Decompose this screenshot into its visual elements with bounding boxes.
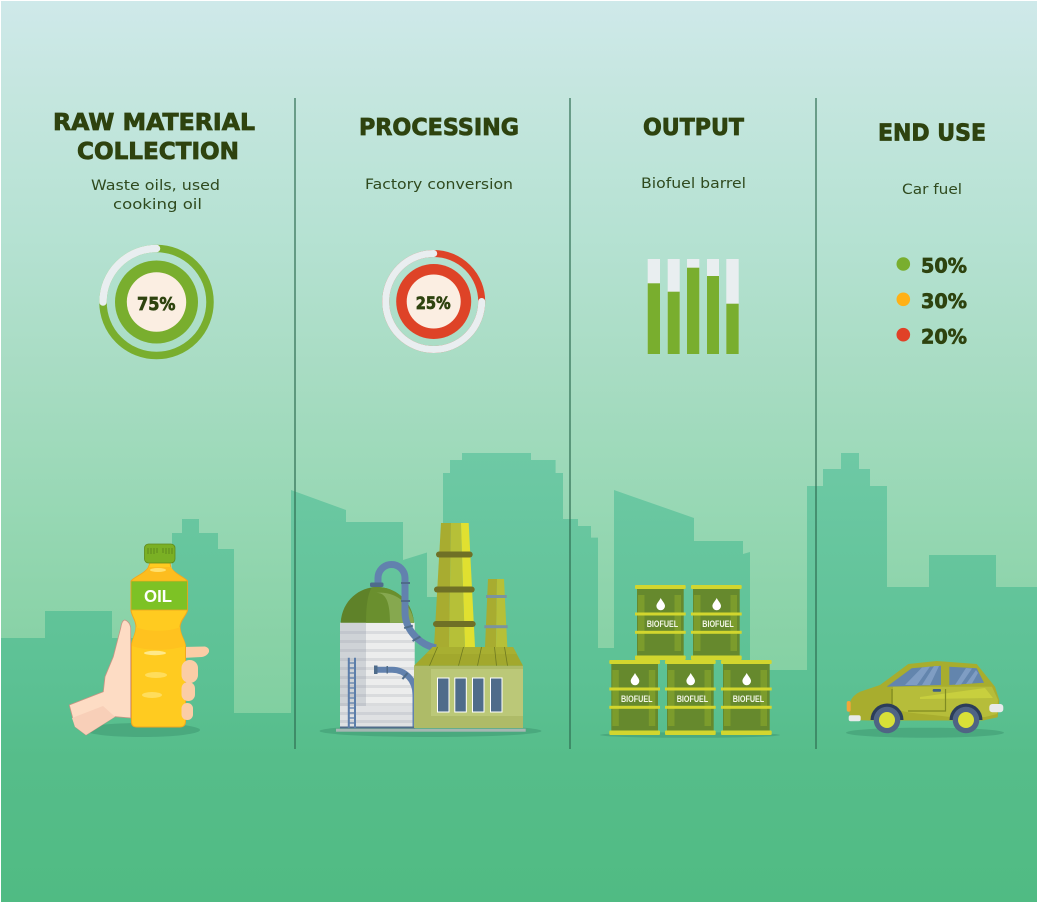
- palm and thumb: [69, 620, 131, 735]
- panel: processing: [320, 115, 542, 737]
- barrel: bottom middle: [665, 660, 716, 735]
- oil bottle: OIL: [144, 586, 172, 606]
- barrel: top left: BIOFUEL: [647, 619, 678, 630]
- shadow: [600, 732, 780, 738]
- rear wheel: [950, 704, 982, 733]
- foundation: [336, 729, 526, 732]
- windows: [887, 666, 984, 687]
- barrel: bottom left: [609, 660, 660, 735]
- heading: processing: PROCESSING: [359, 115, 519, 141]
- barrel: bottom right: [721, 660, 772, 735]
- shadow: [846, 728, 1004, 738]
- donut chart: 75%: [103, 248, 210, 356]
- factory building: [414, 647, 523, 728]
- large chimney: [433, 523, 476, 647]
- subtext: car fuel: Car fuel: [902, 182, 962, 198]
- subtext: waste oils: [91, 178, 220, 213]
- lights and bumpers: [847, 701, 1003, 721]
- illustration: stacked biofuel barrels: [600, 585, 780, 738]
- door lines and handle: [892, 689, 946, 711]
- subtext: waste oils: Waste oils, used: [91, 178, 220, 194]
- pipe fittings: [340, 582, 421, 728]
- legend: fuel percentages: 20%: [921, 326, 967, 349]
- illustration: hand holding oil bottle: [69, 544, 209, 737]
- bar chart: [648, 259, 739, 354]
- storage tank: [340, 587, 415, 728]
- donut chart: 25%: [386, 254, 482, 350]
- panel: raw material collection: [53, 110, 255, 737]
- palm shading: [72, 706, 115, 735]
- subtext: waste oils: cooking oil: [113, 197, 202, 213]
- oil bottle: [131, 544, 188, 727]
- illustration: car: [846, 661, 1004, 738]
- donut chart: 75%: 75%: [137, 294, 176, 315]
- panel: end use: [846, 121, 1004, 738]
- index finger: [182, 646, 209, 658]
- legend: fuel percentages: 30%: [921, 290, 967, 313]
- legend: fuel percentages: 50%: [921, 255, 967, 278]
- subtext: factory conversion: Factory conversion: [365, 177, 513, 193]
- heading: raw material collection: [53, 110, 255, 165]
- pipes: [376, 564, 436, 728]
- illustration: factory: [320, 523, 542, 737]
- subtext: biofuel barrel: Biofuel barrel: [641, 176, 746, 192]
- barrel: bottom left: BIOFUEL: [621, 694, 653, 705]
- door panel highlight: [893, 687, 998, 717]
- gripping fingers: [182, 660, 198, 720]
- shadow: [84, 723, 200, 737]
- legend: fuel percentages: [896, 255, 967, 349]
- barrel: top right: BIOFUEL: [702, 619, 734, 630]
- ladder: [349, 658, 355, 728]
- barrel: bottom right: BIOFUEL: [733, 694, 764, 705]
- donut chart: 25%: 25%: [416, 294, 451, 313]
- heading: raw material collection: COLLECTION: [77, 139, 239, 165]
- heading: output: OUTPUT: [643, 115, 744, 141]
- heading: raw material collection: RAW MATERIAL: [53, 110, 255, 136]
- barrel: top right: [691, 585, 742, 660]
- city skyline silhouette: [1, 453, 1037, 902]
- heading: end use: END USE: [878, 121, 986, 147]
- front wheel: [870, 704, 904, 733]
- barrel: top left: [635, 585, 686, 660]
- small chimney: [484, 579, 508, 647]
- car body: [849, 661, 999, 720]
- panel: output: [600, 115, 780, 738]
- barrel: bottom middle: BIOFUEL: [677, 694, 708, 705]
- shadow: [320, 725, 542, 737]
